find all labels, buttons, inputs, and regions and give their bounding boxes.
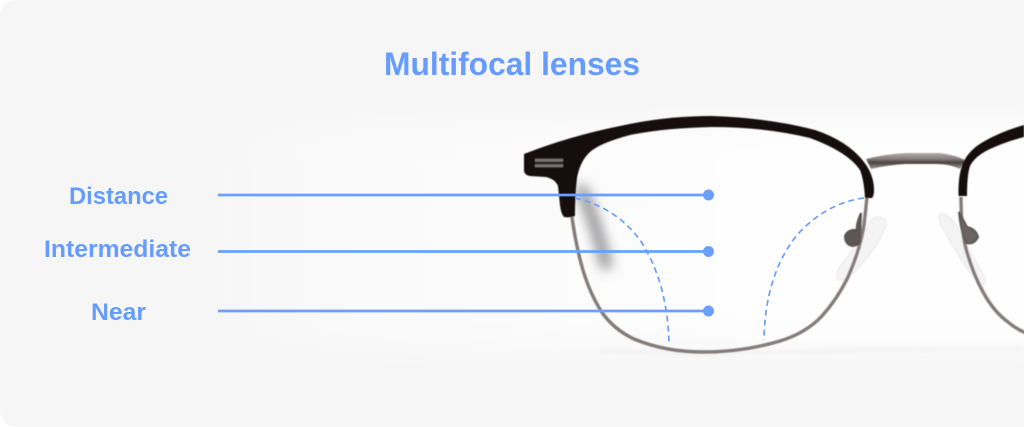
label: Distance: Distance: [69, 183, 168, 210]
left nose arm: [845, 213, 861, 246]
surface shadow: [600, 349, 1024, 353]
bridge: [866, 153, 965, 169]
glasses: [524, 116, 1024, 352]
title: Multifocal lenses: [384, 46, 640, 82]
right nose arm: [959, 212, 978, 243]
pointer: near: [218, 306, 714, 316]
right lens black upper rim: [958, 125, 1024, 196]
right nose pad: [939, 214, 986, 290]
pointer: intermediate: [218, 246, 714, 257]
right lens lower metal rim: [961, 197, 1024, 333]
photo backdrop: [230, 122, 1024, 347]
label: Near: Near: [91, 299, 146, 326]
label: Intermediate: Intermediate: [44, 236, 191, 263]
temple shadow on lens: [582, 190, 606, 264]
distance zone dashed boundary left: [575, 198, 669, 345]
left lens black upper rim: [524, 116, 874, 217]
distance zone dashed boundary right: [764, 198, 864, 340]
pointer: distance: [218, 190, 714, 200]
temple hinge detail: [535, 158, 563, 168]
left nose pad: [837, 217, 886, 280]
left lens lower metal rim: [572, 197, 867, 352]
